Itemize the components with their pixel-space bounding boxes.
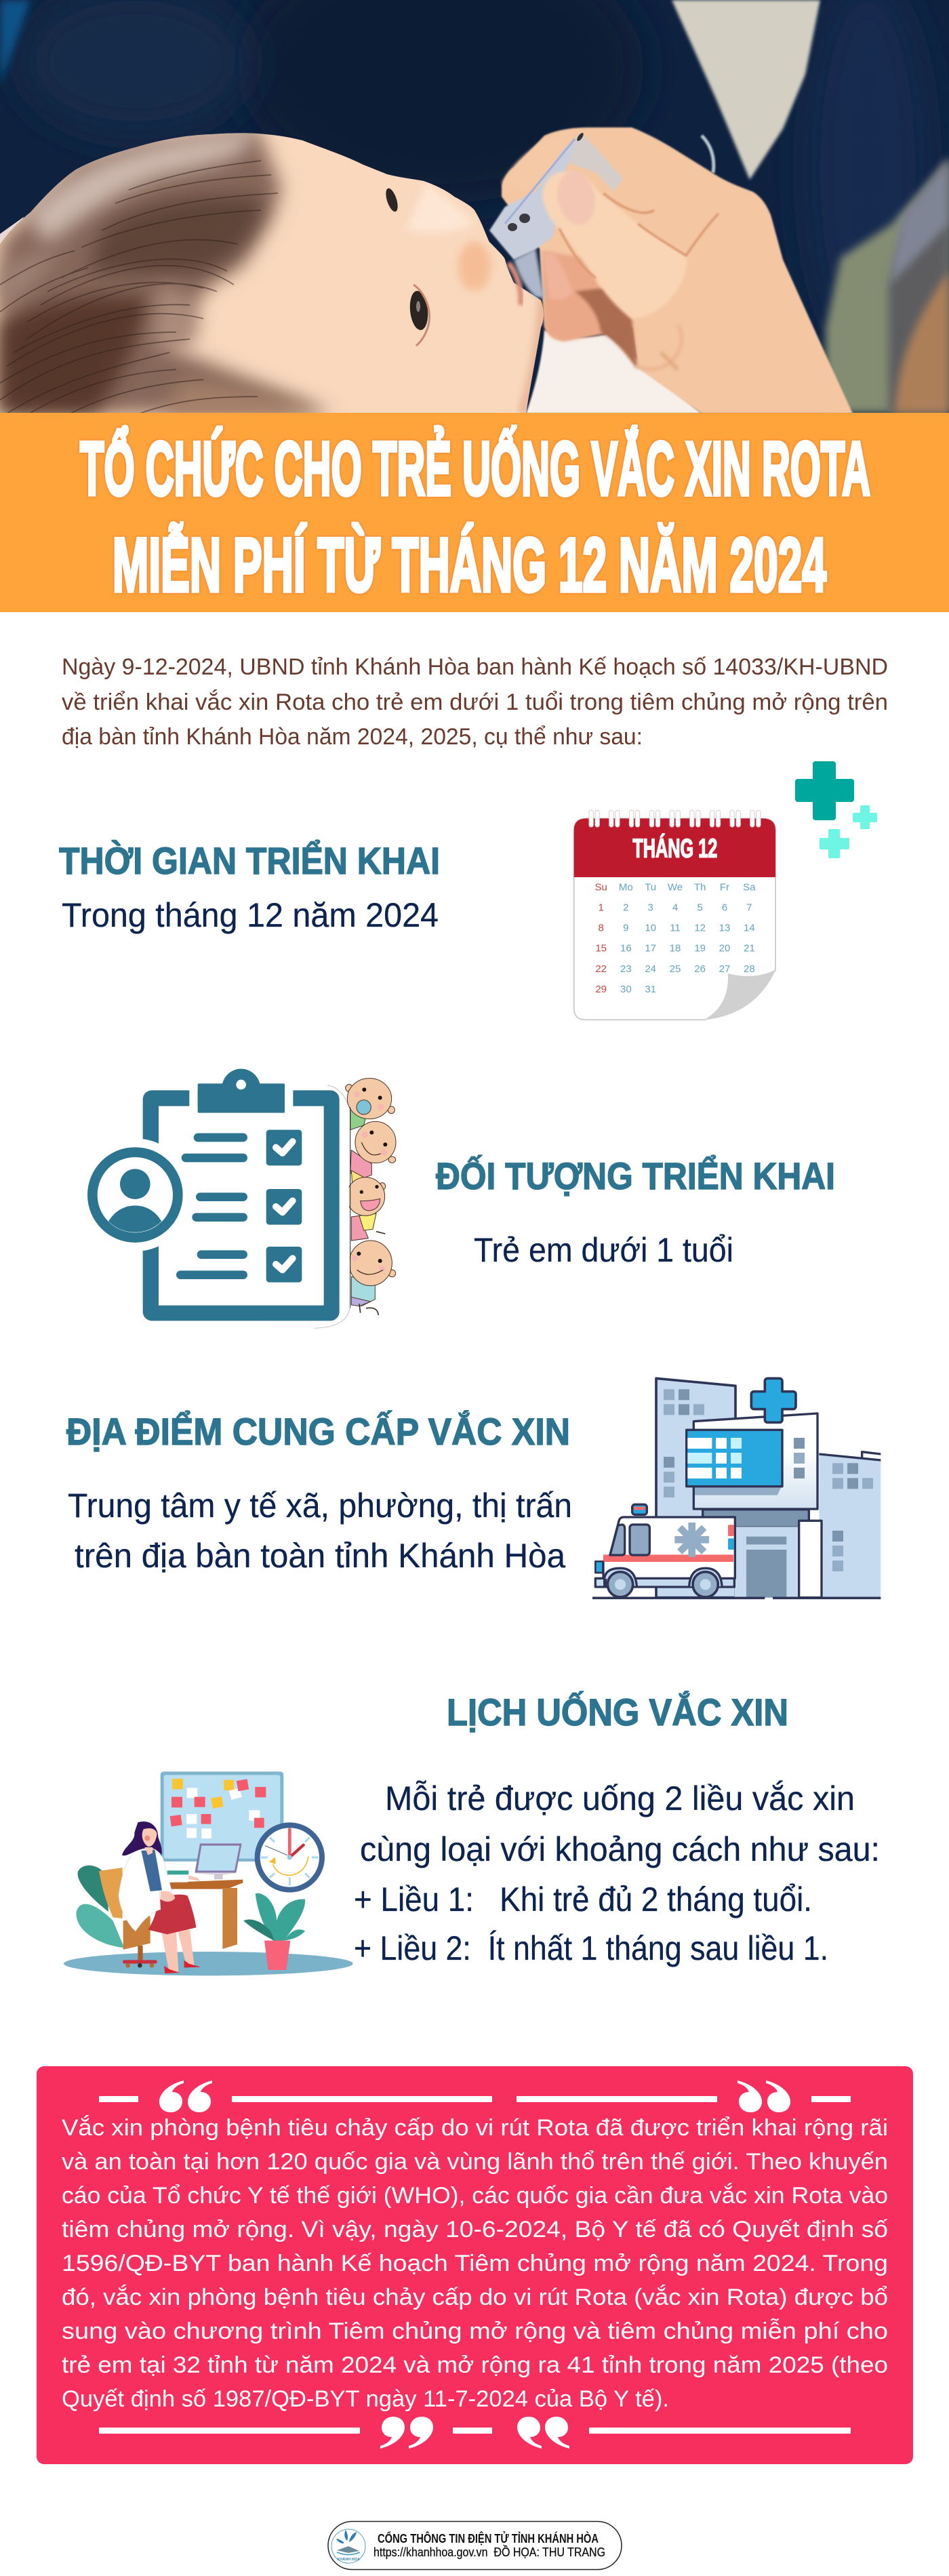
clipboard bbox=[143, 1090, 340, 1321]
left leaves bbox=[78, 1866, 108, 1912]
text: schedule: cùng loại với khoảng cách như sau: bbox=[360, 1830, 880, 1868]
calendar: Su bbox=[595, 881, 607, 893]
calendar: 29 bbox=[595, 984, 607, 995]
note text: Quyết định số 1987/QĐ-BYT ngày 11-7-2024 của Bộ Y tế). bbox=[62, 2386, 669, 2412]
text: location: trên địa bàn toàn tỉnh Khánh Hòa bbox=[75, 1537, 565, 1575]
skirt bbox=[148, 1895, 196, 1934]
calendar: 25 bbox=[670, 963, 681, 975]
note text: và an toàn tại hơn 120 quốc gia và vùng lãnh thổ trên thế giới. Theo khuyến bbox=[62, 2149, 888, 2175]
text: schedule: + Liều 2: Ít nhất 1 tháng sau liều 1. bbox=[354, 1929, 828, 1967]
calendar: 19 bbox=[694, 943, 706, 954]
note text: sung vào chương trình Tiêm chủng mở rộng và tiêm chủng miễn phí cho bbox=[62, 2318, 888, 2344]
calendar bbox=[574, 810, 775, 1020]
calendar: 7 bbox=[746, 902, 752, 913]
calendar: Th bbox=[694, 881, 706, 893]
note text: cáo của Tổ chức Y tế thế giới (WHO), các quốc gia cần đưa vắc xin Rota vào bbox=[62, 2183, 888, 2209]
calendar: We bbox=[668, 881, 683, 893]
calendar: 27 bbox=[719, 963, 730, 975]
top quote rule bbox=[99, 2080, 851, 2112]
baby head bbox=[0, 133, 544, 413]
desk and computer bbox=[163, 1880, 243, 1889]
note text: trẻ em tại 32 tỉnh từ năm 2024 và mở rộng ra 41 tỉnh trong năm 2025 (theo bbox=[62, 2352, 888, 2378]
head and hair bbox=[122, 1822, 162, 1855]
calendar: 12 bbox=[694, 922, 706, 933]
intro text: về triển khai vắc xin Rota cho trẻ em dưới 1 tuổi trong tiêm chủng mở rộng trên bbox=[62, 689, 888, 715]
text: schedule: Mỗi trẻ được uống 2 liều vắc xin bbox=[385, 1779, 855, 1817]
text: schedule bbox=[354, 1779, 880, 1967]
text: time: Trong tháng 12 năm 2024 bbox=[62, 896, 439, 934]
logo: KHÁNH HÒA bbox=[337, 2556, 360, 2562]
calendar: 11 bbox=[670, 922, 681, 933]
note text: 1596/QĐ-BYT ban hành Kế hoạch Tiêm chủng mở rộng năm 2024. Trong bbox=[62, 2251, 888, 2276]
text: location: Trung tâm y tế xã, phường, thị trấn bbox=[68, 1487, 572, 1525]
legs and shoes bbox=[161, 1930, 195, 1971]
clock bbox=[255, 1822, 325, 1893]
footer badge: CỔNG THÔNG TIN ĐIỆN TỬ TỈNH KHÁNH HÒA bbox=[378, 2531, 599, 2545]
text: location bbox=[68, 1487, 572, 1575]
thumb bbox=[542, 172, 687, 319]
calendar: 10 bbox=[645, 922, 656, 933]
calendar: 8 bbox=[598, 922, 604, 933]
calendar: 9 bbox=[623, 922, 629, 933]
calendar: 15 bbox=[595, 943, 607, 954]
intro text: Ngày 9-12-2024, UBND tỉnh Khánh Hòa ban hành Kế hoạch số 14033/KH-UBND bbox=[62, 654, 888, 680]
note text: tiêm chủng mở rộng. Vì vậy, ngày 10-6-2024, Bộ Y tế đã có Quyết định số bbox=[62, 2217, 888, 2242]
chair bbox=[99, 1868, 123, 1918]
text: schedule: + Liều 1: Khi trẻ đủ 2 tháng tuổi. bbox=[354, 1880, 812, 1918]
calendar: 22 bbox=[595, 963, 607, 975]
calendar: 3 bbox=[647, 902, 653, 913]
intro text bbox=[62, 654, 888, 750]
calendar: Sa bbox=[743, 881, 756, 893]
calendar: 21 bbox=[744, 943, 755, 954]
icon: doctor at desk bbox=[64, 1771, 353, 1975]
calendar: 28 bbox=[744, 963, 755, 975]
calendar: 5 bbox=[697, 902, 703, 913]
note text: Vắc xin phòng bệnh tiêu chảy cấp do vi rút Rota đã được triển khai rộng rãi bbox=[62, 2115, 888, 2141]
calendar: 2 bbox=[623, 902, 629, 913]
panel: background note bbox=[37, 2066, 913, 2464]
calendar: 6 bbox=[722, 902, 727, 913]
calendar: Mo bbox=[619, 881, 633, 893]
baby eyes and lips bbox=[409, 291, 428, 330]
calendar: 1 bbox=[598, 902, 604, 913]
intro text: địa bàn tỉnh Khánh Hòa năm 2024, 2025, cụ thể như sau: bbox=[62, 724, 643, 750]
heading: target: ĐỐI TƯỢNG TRIỂN KHAI bbox=[436, 1154, 835, 1197]
fingers and shadows bbox=[542, 251, 638, 368]
text: target: Trẻ em dưới 1 tuổi bbox=[474, 1231, 733, 1269]
calendar: 14 bbox=[744, 922, 755, 933]
note text: đó, vắc xin phòng bệnh tiêu chảy cấp do vi rút Rota (vắc xin Rota) được bổ bbox=[62, 2285, 888, 2310]
footer badge bbox=[328, 2522, 622, 2569]
heading: schedule: LỊCH UỐNG VẮC XIN bbox=[447, 1691, 788, 1733]
cloth bbox=[526, 330, 702, 414]
calendar: Tu bbox=[645, 881, 656, 893]
calendar: 20 bbox=[719, 943, 730, 954]
calendar: 18 bbox=[670, 943, 681, 954]
calendar: 17 bbox=[645, 943, 656, 954]
calendar: 31 bbox=[645, 984, 656, 995]
babies peeking bbox=[346, 1079, 396, 1306]
hand bbox=[502, 127, 853, 414]
note text bbox=[62, 2115, 888, 2412]
calendar: 16 bbox=[620, 943, 632, 954]
oral syringe bbox=[489, 132, 623, 298]
icon: hospital and ambulance bbox=[592, 1378, 881, 1598]
heading: time: THỜI GIAN TRIỂN KHAI bbox=[59, 839, 440, 882]
checklist lines bbox=[176, 1130, 302, 1283]
calendar: Fr bbox=[720, 881, 729, 893]
title band bbox=[0, 413, 949, 612]
bottom quote rule bbox=[99, 2417, 851, 2449]
calendar: 24 bbox=[645, 963, 656, 975]
plant bbox=[256, 1893, 305, 1941]
paper edge bbox=[314, 1085, 350, 1328]
calendar: 4 bbox=[672, 902, 678, 913]
calendar: 30 bbox=[620, 984, 632, 995]
heading: location: ĐỊA ĐIỂM CUNG CẤP VẮC XIN bbox=[66, 1410, 570, 1453]
logo bbox=[331, 2529, 365, 2563]
icon: medical crosses bbox=[795, 761, 877, 858]
footer badge: https://khanhhoa.gov.vn ĐỒ HỌA: THU TRANG bbox=[373, 2545, 605, 2559]
calendar: 23 bbox=[620, 963, 632, 975]
calendar: 13 bbox=[719, 922, 730, 933]
calendar: 26 bbox=[694, 963, 706, 975]
calendar: THÁNG 12 bbox=[632, 833, 717, 863]
person badge bbox=[79, 1138, 192, 1251]
icon: clipboard checklist with babies bbox=[79, 1069, 396, 1328]
coat bbox=[119, 1849, 171, 1931]
ambulance bbox=[632, 1504, 647, 1514]
title bbox=[80, 426, 870, 607]
photo: baby receiving oral vaccine bbox=[0, 0, 949, 420]
